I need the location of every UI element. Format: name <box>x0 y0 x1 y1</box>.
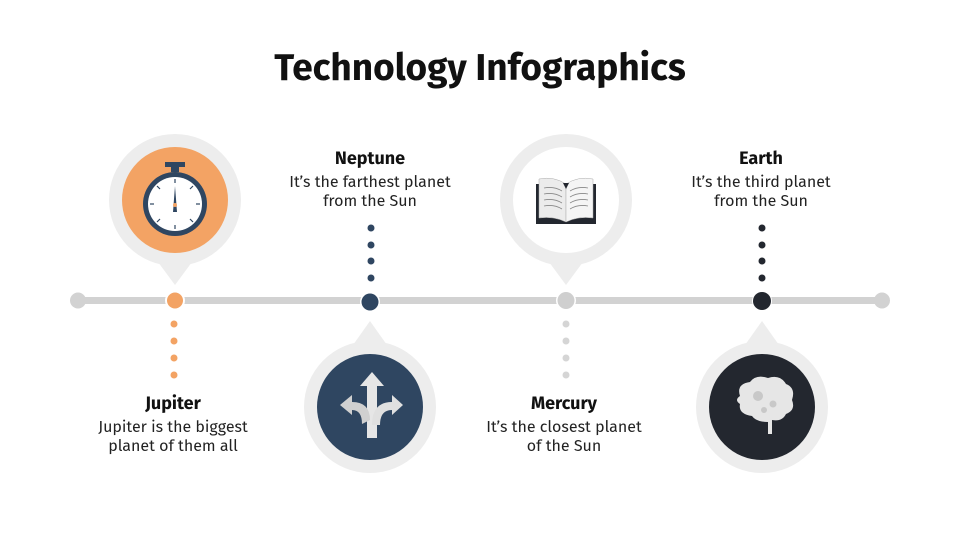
text: Earth: It’s the third planet <box>691 173 831 192</box>
text: Mercury: Mercury <box>531 392 597 414</box>
text: Mercury: of the Sun <box>527 437 601 456</box>
text: Mercury <box>486 392 642 456</box>
node: Neptune <box>360 224 380 312</box>
icon: stopwatch <box>143 162 207 236</box>
text: Jupiter <box>98 392 248 456</box>
text: Jupiter: planet of them all <box>108 437 238 456</box>
icon: book <box>536 178 596 224</box>
title: Technology Infographics <box>274 45 686 90</box>
text: Earth: from the Sun <box>714 192 808 211</box>
pin: Earth brain <box>696 321 828 473</box>
text: Jupiter: Jupiter is the biggest <box>98 418 248 437</box>
text: Jupiter: Jupiter <box>145 392 201 414</box>
node: Mercury <box>556 290 576 378</box>
pin: Jupiter stopwatch <box>109 134 241 285</box>
text: Mercury: It’s the closest planet <box>486 418 642 437</box>
node: Earth <box>752 224 772 311</box>
text: Neptune: It’s the farthest planet <box>289 173 451 192</box>
timeline line <box>70 292 890 308</box>
node: Jupiter <box>165 290 185 378</box>
text: Earth <box>691 147 831 211</box>
text: Earth: Earth <box>739 147 783 169</box>
icon: split arrows <box>340 372 403 438</box>
icon: brain <box>737 377 793 434</box>
text: Neptune: Neptune <box>335 147 405 169</box>
text: Neptune: from the Sun <box>323 192 417 211</box>
pin: Neptune arrows <box>304 321 436 473</box>
text: Neptune <box>289 147 451 211</box>
pin: Mercury book <box>500 134 632 285</box>
